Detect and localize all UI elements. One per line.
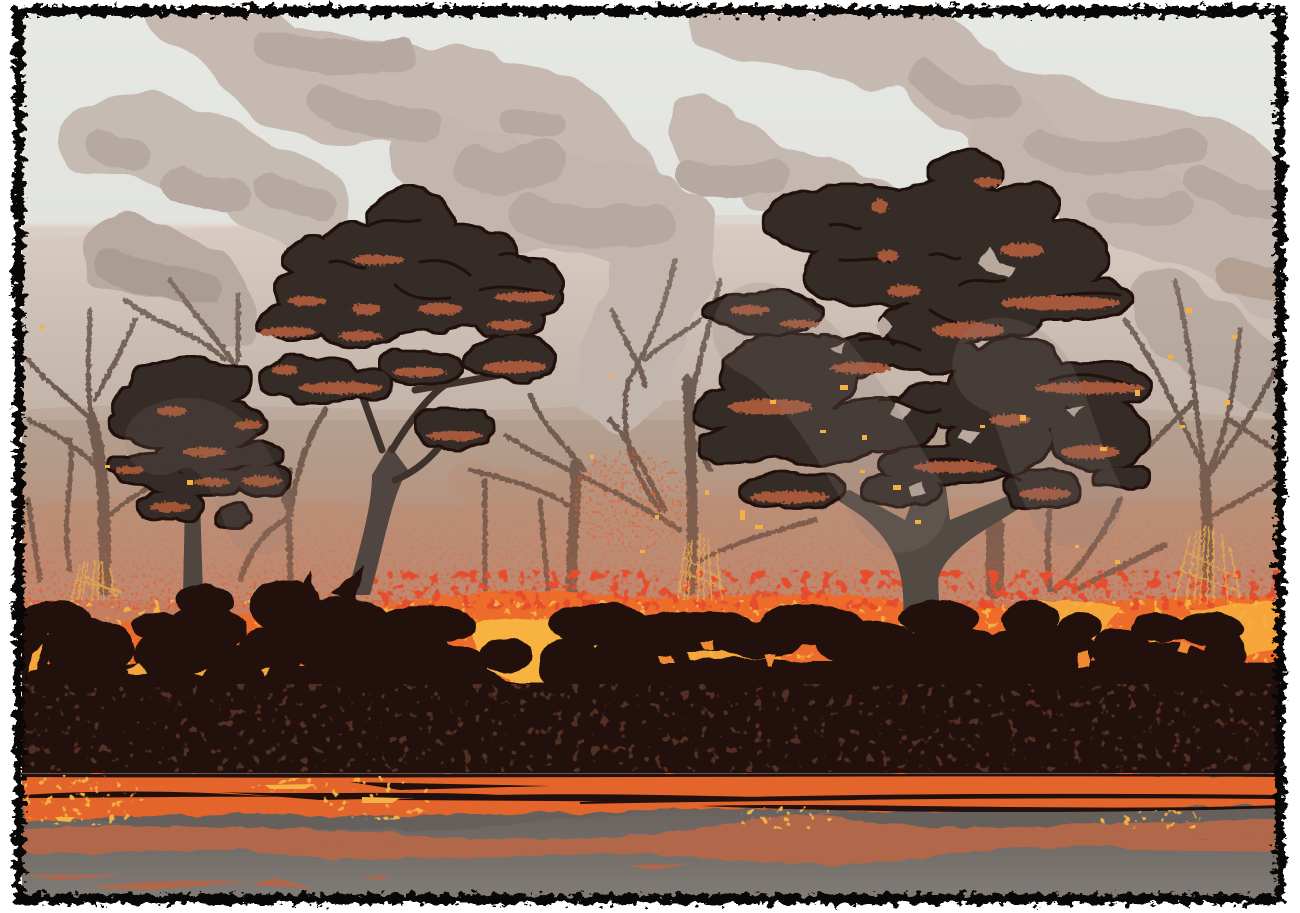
- trunk and branches: [838, 486, 1018, 611]
- smoke plumes, upper: [105, 10, 1270, 504]
- sky background: [22, 14, 1280, 654]
- canopy contour lines: [830, 224, 1130, 480]
- foliage highlights: [115, 406, 282, 512]
- fire speckle glow: [22, 440, 1280, 610]
- embers: floating yellow flecks: [40, 308, 1237, 564]
- foliage highlights: [260, 255, 555, 441]
- shrub speckle texture: [22, 684, 1280, 772]
- trunk and branches: [347, 445, 408, 595]
- water: orange band: [22, 775, 1280, 822]
- water: yellow glints: [55, 784, 400, 822]
- canopy contour lines: [330, 220, 545, 299]
- tree: large right: [695, 153, 1152, 620]
- bare tree: far right: [1125, 280, 1275, 590]
- water: dark ripple lines: [22, 774, 1280, 812]
- foliage highlights: [728, 177, 1145, 503]
- water: grey ripples: [90, 805, 1280, 830]
- smoke veil over foliage: [760, 330, 1075, 505]
- water: brown reflections: [22, 813, 1280, 864]
- canopy: [260, 189, 562, 447]
- canopy gaps showing sky: [832, 245, 1086, 496]
- distant haze bands: [22, 215, 1280, 600]
- branches: [202, 496, 204, 498]
- gaps between shrubs: [30, 640, 1190, 678]
- bare trees in the background: [28, 260, 1275, 600]
- water: yellow flecks: [22, 775, 1280, 835]
- smoke veil over foliage: [160, 433, 260, 520]
- water: ember reflections: [22, 773, 1280, 903]
- smoke inner shades: [100, 45, 1270, 290]
- tree: middle: [260, 189, 562, 595]
- embers near ground: yellow tufts: [72, 525, 1240, 604]
- tree: small left: [108, 360, 289, 595]
- bare tree: centre: [470, 260, 815, 600]
- shrubs silhouette: [8, 565, 1290, 780]
- trunk: [183, 516, 203, 589]
- bare tree: mid-ground: [240, 410, 1165, 600]
- canopy: [108, 360, 289, 527]
- bare tree: far left: [28, 280, 238, 590]
- fire band: [25, 570, 1280, 684]
- canopy foliage: [695, 153, 1152, 509]
